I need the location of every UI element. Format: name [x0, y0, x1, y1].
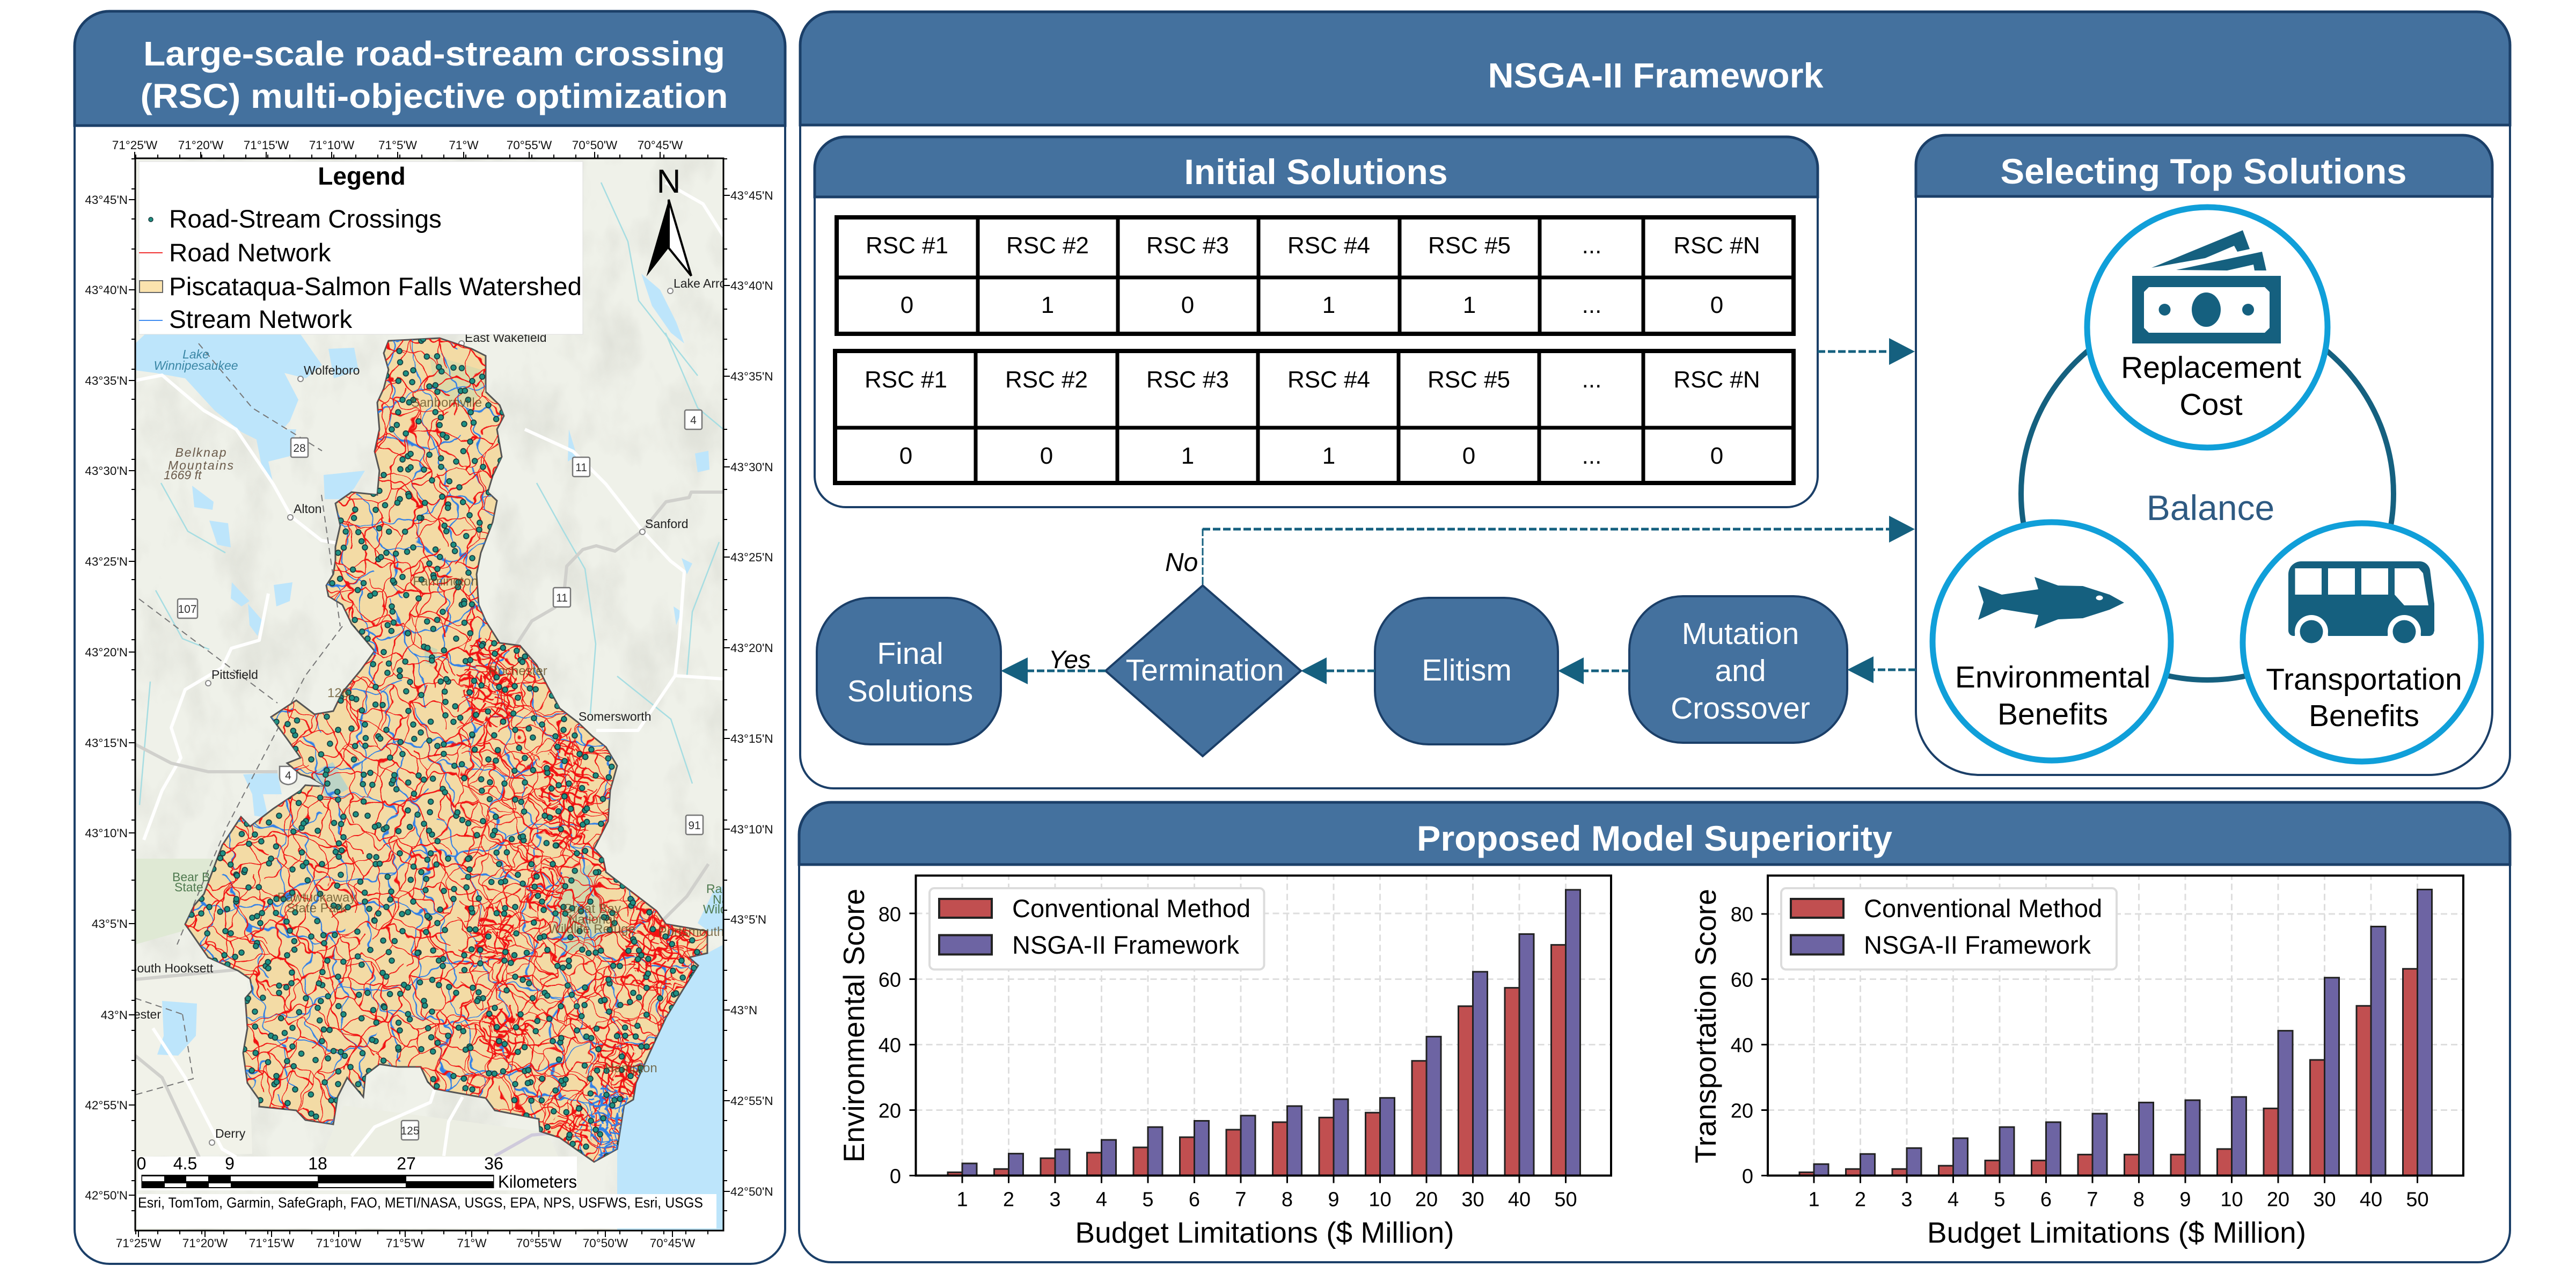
bars: NSGA-II framework	[962, 890, 1580, 1175]
node: mutation and crossover: Crossover	[1671, 691, 1810, 726]
top longitude labels: 71°10'W	[309, 138, 355, 152]
right latitude labels: 43°N	[730, 1004, 757, 1017]
x axis ticks: 4	[1096, 1188, 1107, 1211]
table: solution 1: RSC #3	[1146, 232, 1229, 259]
map: Piscataqua-Salmon Falls watershed with road, stream and crossing network	[184, 337, 722, 1163]
top longitude labels: 70°55'W	[507, 138, 552, 152]
x axis title: Budget Limitations ($ Million)	[1927, 1216, 2306, 1249]
table: solution 2: RSC #3	[1146, 367, 1229, 393]
y axis title: Transportation Score	[1689, 889, 1722, 1163]
table: solution 2: 0	[1710, 443, 1723, 469]
map: Piscataqua-Salmon Falls watershed with road, stream and crossing network: State Park	[287, 901, 347, 916]
left latitude labels: 43°20'N	[85, 646, 128, 659]
objective: replacement cost: Replacement	[2121, 350, 2301, 385]
x axis ticks: 3	[1049, 1188, 1061, 1211]
left latitude labels: 43°10'N	[85, 826, 128, 840]
left latitude labels: 42°50'N	[85, 1189, 128, 1202]
right latitude labels: 43°45'N	[730, 189, 773, 202]
right latitude labels: 43°20'N	[730, 641, 773, 655]
objective: replacement cost	[2087, 207, 2328, 448]
table: solution 2: 1	[1181, 443, 1194, 469]
y axis ticks	[1731, 904, 1753, 1188]
bottom longitude labels: 70°50'W	[583, 1236, 628, 1250]
map: Piscataqua-Salmon Falls watershed with road, stream and crossing network: National	[568, 912, 616, 927]
table: solution 2: RSC #1	[865, 367, 947, 393]
heading: Selecting Top Solutions	[1916, 135, 2492, 196]
map: watershed basemap: Somersworth	[579, 709, 651, 723]
left latitude labels: 42°55'N	[85, 1099, 128, 1112]
objective: environmental benefits: Benefits	[1997, 697, 2108, 731]
map: watershed basemap: Pittsfield	[211, 668, 258, 682]
scale bar: 18	[308, 1154, 327, 1173]
map: watershed basemap: Wolfeboro	[304, 363, 360, 377]
map: watershed basemap: 28	[293, 442, 306, 455]
map: watershed basemap: Alton	[294, 502, 321, 516]
icon: money	[2132, 230, 2281, 343]
x axis title: Budget Limitations ($ Million)	[1075, 1216, 1454, 1249]
x axis ticks: 5	[1142, 1188, 1154, 1211]
chart legend: Conventional Method	[1864, 894, 2102, 923]
heading: Proposed Model Superiority	[799, 802, 2510, 865]
top longitude labels: 70°45'W	[638, 138, 683, 152]
panel: proposed model superiority	[799, 802, 2510, 1262]
arrow: termination to final solutions	[1001, 657, 1106, 684]
y axis ticks: 0	[1742, 1166, 1753, 1188]
x axis ticks: 10	[2220, 1188, 2243, 1211]
scale bar: 4.5	[173, 1154, 197, 1173]
x axis ticks: 30	[2313, 1188, 2336, 1211]
table: solution 2: RSC #N	[1673, 367, 1760, 393]
x axis ticks: 40	[1508, 1188, 1531, 1211]
top longitude labels: 70°50'W	[572, 138, 618, 152]
scale bar: 27	[397, 1154, 416, 1173]
node: mutation and crossover	[1629, 596, 1847, 743]
map: Piscataqua-Salmon Falls watershed with road, stream and crossing network: Farmington	[413, 574, 478, 589]
map: watershed basemap: 1669 ft	[164, 468, 202, 482]
map legend: Piscataqua-Salmon Falls Watershed	[169, 273, 582, 301]
map: watershed basemap: Rachel	[706, 882, 745, 896]
bottom longitude labels: 70°55'W	[516, 1236, 562, 1250]
heading: Initial Solutions	[815, 137, 1818, 197]
right latitude labels: 42°55'N	[730, 1094, 773, 1108]
node: final solutions: Final	[877, 636, 943, 671]
left latitude labels: 43°35'N	[85, 374, 128, 387]
x axis ticks: 30	[1461, 1188, 1484, 1211]
icon: bus	[2288, 561, 2436, 648]
right latitude labels: 43°35'N	[730, 370, 773, 383]
chart legend	[930, 888, 1264, 969]
top longitude labels: 71°5'W	[378, 138, 418, 152]
y axis ticks: 60	[1731, 969, 1753, 992]
table: solution 1: 0	[901, 292, 913, 318]
table: solution 2: RSC #2	[1005, 367, 1088, 393]
table: solution 2: 1	[1322, 443, 1335, 469]
arrow: selection to mutation	[1847, 656, 1916, 683]
table: solution 1: ...	[1582, 292, 1601, 318]
bottom longitude labels	[116, 1236, 696, 1250]
x axis ticks: 1	[1808, 1188, 1820, 1211]
chart legend: NSGA-II Framework	[1012, 931, 1240, 959]
y axis ticks: 80	[879, 904, 901, 926]
bottom longitude labels: 71°25'W	[116, 1236, 162, 1250]
panel: NSGA-II framework	[800, 12, 2510, 788]
top longitude labels: 71°W	[449, 138, 479, 152]
table: solution 1: RSC #5	[1428, 232, 1511, 259]
x axis ticks: 2	[1003, 1188, 1014, 1211]
heading: Selecting Top Solutions: Selecting Top Solutions	[2001, 151, 2406, 191]
panel: initial solutions	[815, 137, 1818, 507]
x axis ticks: 6	[2040, 1188, 2052, 1211]
map: watershed basemap: Mountains	[168, 458, 235, 472]
map: watershed basemap: 125	[400, 1125, 420, 1137]
table: solution 1: 0	[1710, 292, 1723, 318]
top longitude labels: 71°25'W	[112, 138, 158, 152]
balance ring	[2021, 308, 2394, 680]
balance ring: Balance	[2147, 488, 2274, 528]
map: watershed basemap: Bear Brook	[172, 870, 235, 884]
node: elitism	[1375, 598, 1558, 744]
right latitude labels: 43°40'N	[730, 279, 773, 292]
map: watershed basemap: State Park	[174, 880, 232, 894]
label: No: No	[1165, 548, 1198, 577]
map frame and graticule ticks	[129, 152, 730, 1237]
map legend: Road-Stream Crossings	[169, 205, 442, 233]
x axis ticks: 4	[1948, 1188, 1959, 1211]
panel heading: large-scale RSC optimization: (RSC) multi-objective optimization	[141, 77, 728, 115]
heading: Initial Solutions: Initial Solutions	[1184, 152, 1448, 192]
heading: NSGA-II Framework: NSGA-II Framework	[1488, 56, 1824, 95]
table: solution 1: RSC #1	[866, 232, 948, 259]
x axis ticks: 3	[1901, 1188, 1913, 1211]
map: Piscataqua-Salmon Falls watershed with road, stream and crossing network: Pawtuckaway	[277, 890, 356, 905]
left latitude labels: 43°5'N	[92, 917, 128, 931]
scale bar: Kilometers	[498, 1172, 577, 1191]
map attribution: Esri, TomTom, Garmin, SafeGraph, FAO, METI/NASA, USGS, EPA, NPS, USFWS, Esri, USGS	[138, 1195, 703, 1211]
right latitude labels: 43°15'N	[730, 732, 773, 745]
objective: transportation benefits: Benefits	[2309, 699, 2419, 733]
table: solution 1: RSC #N	[1673, 232, 1760, 259]
map: watershed basemap: South Hooksett	[129, 961, 214, 975]
x axis ticks: 8	[1282, 1188, 1293, 1211]
table: solution 1: 1	[1041, 292, 1054, 318]
x axis ticks	[1808, 1188, 2429, 1211]
map: Piscataqua-Salmon Falls watershed with road, stream and crossing network: Sanbornville	[411, 396, 482, 410]
table: solution 1: ...	[1582, 232, 1601, 259]
label: Yes: Yes	[1049, 645, 1091, 674]
map legend: Legend	[318, 162, 406, 190]
bars: conventional method	[948, 945, 1566, 1175]
node: mutation and crossover: and	[1715, 654, 1766, 688]
bars: conventional method	[1799, 969, 2417, 1175]
table: solution 2: ...	[1582, 443, 1601, 469]
x axis ticks: 20	[2267, 1188, 2289, 1211]
x axis ticks: 9	[1328, 1188, 1340, 1211]
objective: transportation benefits: Transportation	[2266, 662, 2462, 697]
map: watershed basemap: Lake Arrowhead	[674, 276, 763, 290]
map: watershed basemap	[136, 159, 722, 1230]
x axis ticks: 50	[2406, 1188, 2429, 1211]
map: watershed basemap: Derry	[215, 1126, 246, 1140]
panel heading: large-scale RSC optimization: Large-scale road-stream crossing	[143, 34, 725, 73]
top longitude labels: 71°20'W	[178, 138, 224, 152]
heading: Proposed Model Superiority: Proposed Model Superiority	[1417, 818, 1892, 858]
map: watershed basemap: Lake	[182, 347, 209, 361]
left latitude labels	[85, 193, 128, 1202]
objective: environmental benefits: Environmental	[1955, 660, 2150, 694]
bottom longitude labels: 71°10'W	[316, 1236, 362, 1250]
table: solution 1: 0	[1181, 292, 1194, 318]
x axis ticks: 5	[1994, 1188, 2006, 1211]
chart legend	[1781, 888, 2117, 969]
left latitude labels: 43°15'N	[85, 736, 128, 750]
table: solution 1: 1	[1322, 292, 1335, 318]
y axis ticks: 20	[1731, 1100, 1753, 1123]
icon: fish	[1978, 577, 2124, 628]
node: mutation and crossover: Mutation	[1682, 617, 1799, 651]
top longitude labels	[112, 138, 683, 152]
x axis ticks: 9	[2179, 1188, 2191, 1211]
map: watershed basemap: National	[713, 892, 758, 906]
table: solution 1	[837, 217, 1794, 334]
left latitude labels: 43°25'N	[85, 555, 128, 568]
table: solution 2	[835, 351, 1794, 483]
node: termination diamond: Termination	[1126, 653, 1284, 687]
map: Piscataqua-Salmon Falls watershed with road, stream and crossing network: Hampton	[605, 1061, 657, 1075]
left latitude labels: 43°30'N	[85, 464, 128, 478]
map: Piscataqua-Salmon Falls watershed with road, stream and crossing network: Wildlife Refuge	[548, 922, 635, 936]
y axis ticks: 60	[879, 969, 901, 992]
table: solution 1: RSC #4	[1287, 232, 1370, 259]
panel heading: large-scale RSC optimization	[75, 11, 785, 126]
map: watershed basemap: 4	[285, 770, 291, 782]
node: termination diamond	[1106, 586, 1301, 756]
table: solution 2: 0	[899, 443, 912, 469]
map: watershed basemap: 91	[688, 819, 701, 832]
x axis ticks: 7	[2087, 1188, 2098, 1211]
right latitude labels: 43°10'N	[730, 823, 773, 836]
node: elitism: Elitism	[1422, 653, 1512, 687]
table: solution 2: 0	[1462, 443, 1475, 469]
bottom longitude labels: 71°W	[457, 1236, 487, 1250]
table: solution 2: RSC #5	[1428, 367, 1510, 393]
x axis ticks: 10	[1368, 1188, 1392, 1211]
right latitude labels: 42°50'N	[730, 1185, 773, 1198]
y axis ticks: 20	[879, 1100, 901, 1123]
map: watershed basemap: 107	[178, 603, 197, 616]
bottom longitude labels: 71°5'W	[386, 1236, 425, 1250]
right latitude labels: 43°30'N	[730, 460, 773, 474]
node: final solutions: Solutions	[847, 674, 973, 708]
table: solution 2: ...	[1582, 367, 1601, 393]
x axis ticks: 40	[2360, 1188, 2382, 1211]
bottom longitude labels: 70°45'W	[650, 1236, 696, 1250]
x axis ticks: 8	[2133, 1188, 2145, 1211]
x axis ticks: 20	[1415, 1188, 1438, 1211]
node: final solutions	[817, 598, 1001, 744]
map: watershed basemap: 11	[556, 592, 568, 604]
map: watershed basemap: 11	[575, 462, 587, 474]
right latitude labels	[730, 189, 773, 1198]
map attribution	[137, 1194, 716, 1228]
table: solution 2: RSC #4	[1287, 367, 1370, 393]
map: watershed basemap: Belknap	[175, 445, 228, 459]
map: Piscataqua-Salmon Falls watershed with road, stream and crossing network: Portsmouth	[658, 925, 724, 939]
x axis ticks: 1	[956, 1188, 968, 1211]
left latitude labels: 43°40'N	[85, 283, 128, 297]
bars: NSGA-II framework	[1814, 889, 2432, 1175]
x axis ticks: 6	[1189, 1188, 1200, 1211]
right latitude labels: 43°5'N	[730, 913, 766, 926]
y axis ticks: 80	[1731, 904, 1753, 926]
map legend	[139, 162, 583, 334]
panel: selecting top solutions	[1916, 135, 2492, 775]
map: watershed basemap: 4	[690, 414, 697, 427]
right latitude labels: 43°25'N	[730, 551, 773, 564]
objective: replacement cost: Cost	[2179, 387, 2243, 422]
chart legend: NSGA-II Framework	[1864, 931, 2091, 959]
scale bar: 36	[484, 1154, 503, 1173]
top longitude labels: 71°15'W	[244, 138, 289, 152]
table: solution 1: RSC #2	[1006, 232, 1089, 259]
x axis ticks: 7	[1235, 1188, 1247, 1211]
map: watershed basemap: Wildlife	[703, 902, 743, 916]
map: watershed basemap: East Wakefield	[465, 331, 547, 345]
icon: north arrow: N	[657, 163, 680, 200]
bar chart: environmental score	[837, 876, 1611, 1249]
scale bar	[137, 1154, 577, 1191]
arrow: elitism to termination	[1301, 657, 1375, 684]
map legend: Stream Network	[169, 305, 352, 334]
bar chart: transportation score	[1689, 876, 2463, 1249]
arrow: termination No back to selection	[1203, 516, 1915, 585]
map: Piscataqua-Salmon Falls watershed with road, stream and crossing network: 126	[327, 686, 349, 700]
table: solution 1: 1	[1463, 292, 1476, 318]
map: watershed basemap: Winnipesaukee	[153, 358, 238, 372]
icon: north arrow	[646, 163, 691, 276]
table: solution 2: 0	[1040, 443, 1053, 469]
map: watershed basemap: Sanford	[645, 517, 689, 531]
panel: RSC map	[75, 11, 785, 1264]
bottom longitude labels: 71°20'W	[182, 1236, 228, 1250]
scale bar: 0	[137, 1154, 146, 1173]
map legend: Road Network	[169, 239, 331, 267]
y axis title: Environmental Score	[837, 889, 870, 1162]
objective: transportation benefits	[2243, 523, 2481, 762]
y axis ticks	[879, 904, 901, 1188]
scale bar: 9	[225, 1154, 235, 1173]
x axis ticks: 50	[1554, 1188, 1577, 1211]
map: Piscataqua-Salmon Falls watershed with road, stream and crossing network: Rochester	[488, 664, 547, 678]
left latitude labels: 43°45'N	[85, 193, 128, 207]
y axis ticks: 40	[1731, 1035, 1753, 1057]
arrow: mutation to elitism	[1558, 657, 1629, 684]
chart legend: Conventional Method	[1012, 894, 1250, 923]
arrow: initial solutions to selecting top solutions	[1818, 338, 1915, 365]
x axis ticks	[956, 1188, 1577, 1211]
bottom longitude labels: 71°15'W	[249, 1236, 295, 1250]
y axis ticks: 0	[890, 1166, 901, 1188]
objective: environmental benefits	[1933, 522, 2171, 760]
map: Piscataqua-Salmon Falls watershed with road, stream and crossing network: Great Bay	[563, 902, 621, 916]
x axis ticks: 2	[1855, 1188, 1866, 1211]
left latitude labels: 43°N	[101, 1008, 128, 1022]
y axis ticks: 40	[879, 1035, 901, 1057]
map: watershed basemap: Manchester	[97, 1007, 161, 1021]
heading: NSGA-II Framework	[800, 12, 2510, 125]
